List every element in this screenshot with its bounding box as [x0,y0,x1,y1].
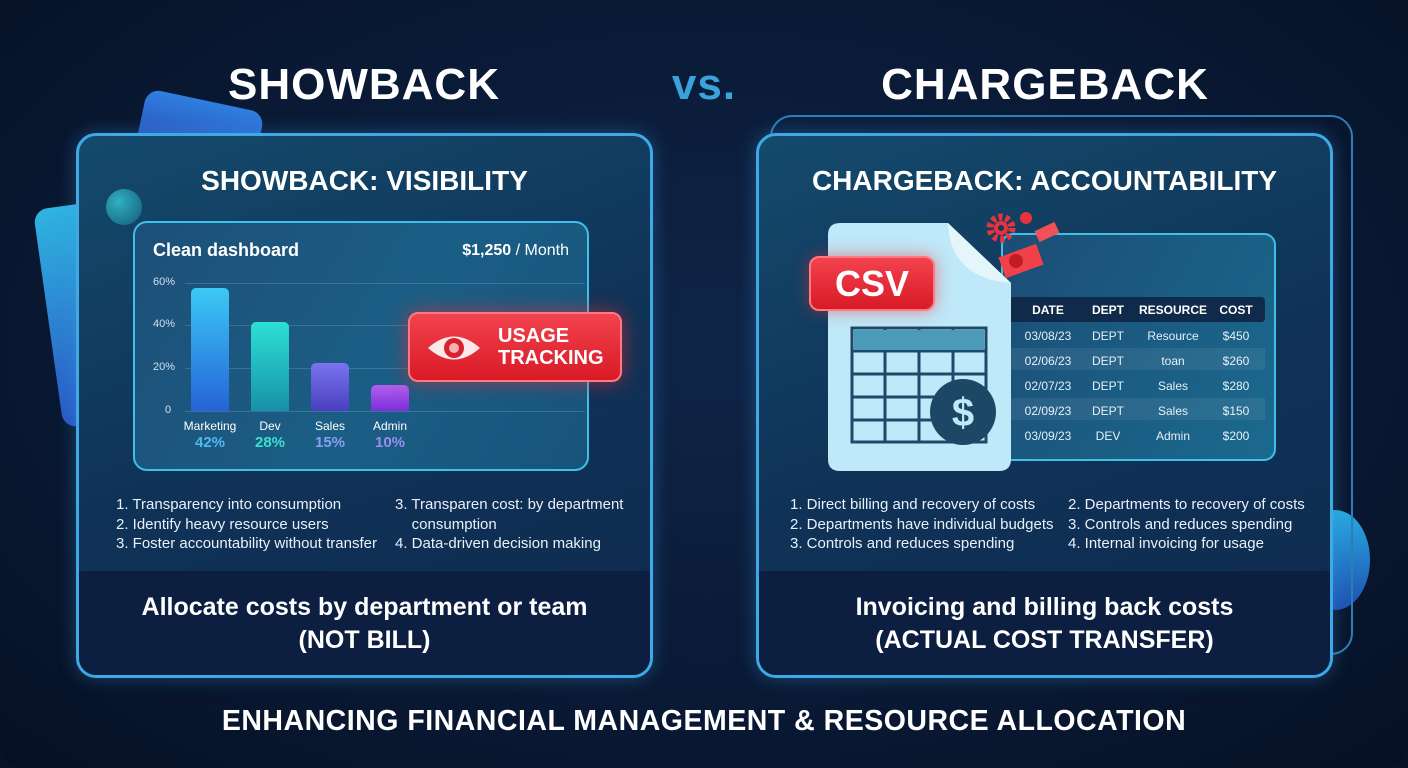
table card: DEPT [1092,303,1124,317]
table rows: 03/08/23 [1025,329,1071,343]
summary text [79,571,650,681]
table rows: 02/09/23 [1025,404,1071,418]
bar chart: 15% [315,434,345,451]
table rows [1011,329,1265,443]
bar chart: 42% [195,434,225,451]
bar chart: 0 [165,404,171,416]
bar chart: Sales [315,419,345,433]
bar chart: 60% [153,276,175,288]
bar chart: Dev [259,419,281,433]
icon: eye [428,336,480,360]
table rows: $280 [1223,379,1249,393]
badge: usage tracking [408,312,622,382]
badge: usage tracking: TRACKING [498,347,604,369]
bullet list left: 2. Departments have individual budgets [790,516,1054,532]
bullet list right: 3. Transparen cost: by department [395,496,623,513]
table rows: $260 [1223,354,1249,368]
bullet list right: 2. Departments to recovery of costs [1068,496,1305,513]
table rows: Resource [1147,329,1199,343]
bullet list left: 1. Transparency into consumption [116,496,341,513]
monthly cost: $1,250 / Month [462,242,569,259]
dashboard card [133,221,589,471]
table rows: Sales [1158,379,1188,393]
title: showback: SHOWBACK [228,60,500,109]
bar chart: Marketing [184,419,236,433]
table rows: toan [1161,354,1185,368]
panel heading: CHARGEBACK: ACCOUNTABILITY [812,165,1277,196]
bar chart: 28% [255,434,285,451]
table rows: 03/09/23 [1025,429,1071,443]
table rows: Admin [1156,429,1190,443]
decorative right circle [1300,510,1370,610]
title: chargeback: CHARGEBACK [881,60,1209,109]
decorative back card left [33,202,123,428]
bullet list right: 4. Internal invoicing for usage [1068,535,1264,552]
bar chart: 10% [375,434,405,451]
summary text: (NOT BILL) [299,626,430,654]
badge: usage tracking: USAGE [498,325,569,347]
summary text [759,571,1330,681]
bullet list left: 3. Foster accountability without transfer [116,535,377,552]
bullet list left [116,496,377,552]
table card: COST [1219,303,1253,317]
bullet list left: 3. Controls and reduces spending [790,535,1014,552]
table rows: 02/07/23 [1025,379,1071,393]
bar chart [153,276,585,451]
bullet list right: 3. Controls and reduces spending [1068,516,1292,532]
panel heading: SHOWBACK: VISIBILITY [201,165,528,196]
bullet list right [1068,496,1305,552]
summary text: (ACTUAL COST TRANSFER) [875,626,1214,654]
bullet list left [790,496,1054,552]
table card: RESOURCE [1139,303,1207,317]
badge: csv: CSV [835,263,909,304]
table rows: 02/06/23 [1025,354,1071,368]
decorative back card top [135,88,265,172]
table card [1001,233,1276,461]
decorative sphere [106,189,142,225]
table header [1003,297,1265,322]
table card: DATE [1032,303,1064,317]
table rows: DEPT [1092,379,1124,393]
table rows: Sales [1158,404,1188,418]
summary text: Allocate costs by department or team [142,593,587,621]
bullet list right: 4. Data-driven decision making [395,535,601,552]
bar chart: Admin [373,419,407,433]
icon: gears and money [986,212,1060,278]
bullet list left: 1. Direct billing and recovery of costs [790,496,1035,513]
panel: chargeback [756,133,1333,678]
table rows: $200 [1223,429,1249,443]
bar chart: 20% [153,361,175,373]
bullet list right: consumption [412,516,497,532]
badge: csv [809,256,935,311]
table rows: DEV [1096,429,1120,443]
table rows: DEPT [1092,329,1124,343]
summary text: Invoicing and billing back costs [856,593,1233,621]
table rows: DEPT [1092,354,1124,368]
bullet list left: 2. Identify heavy resource users [116,516,329,532]
title: vs: vs. [672,60,736,109]
bullet list right [395,496,624,552]
panel: showback [76,133,653,678]
table rows: $150 [1223,404,1249,418]
icon: csv document: $ [952,391,974,435]
bar chart: 40% [153,318,175,330]
footer: ENHANCING FINANCIAL MANAGEMENT & RESOURCE ALLOCATION [222,705,1186,737]
decorative right back card [770,115,1353,655]
dashboard title: Clean dashboard [153,240,299,260]
icon: csv document [828,223,1011,471]
table rows: DEPT [1092,404,1124,418]
table rows: $450 [1223,329,1249,343]
